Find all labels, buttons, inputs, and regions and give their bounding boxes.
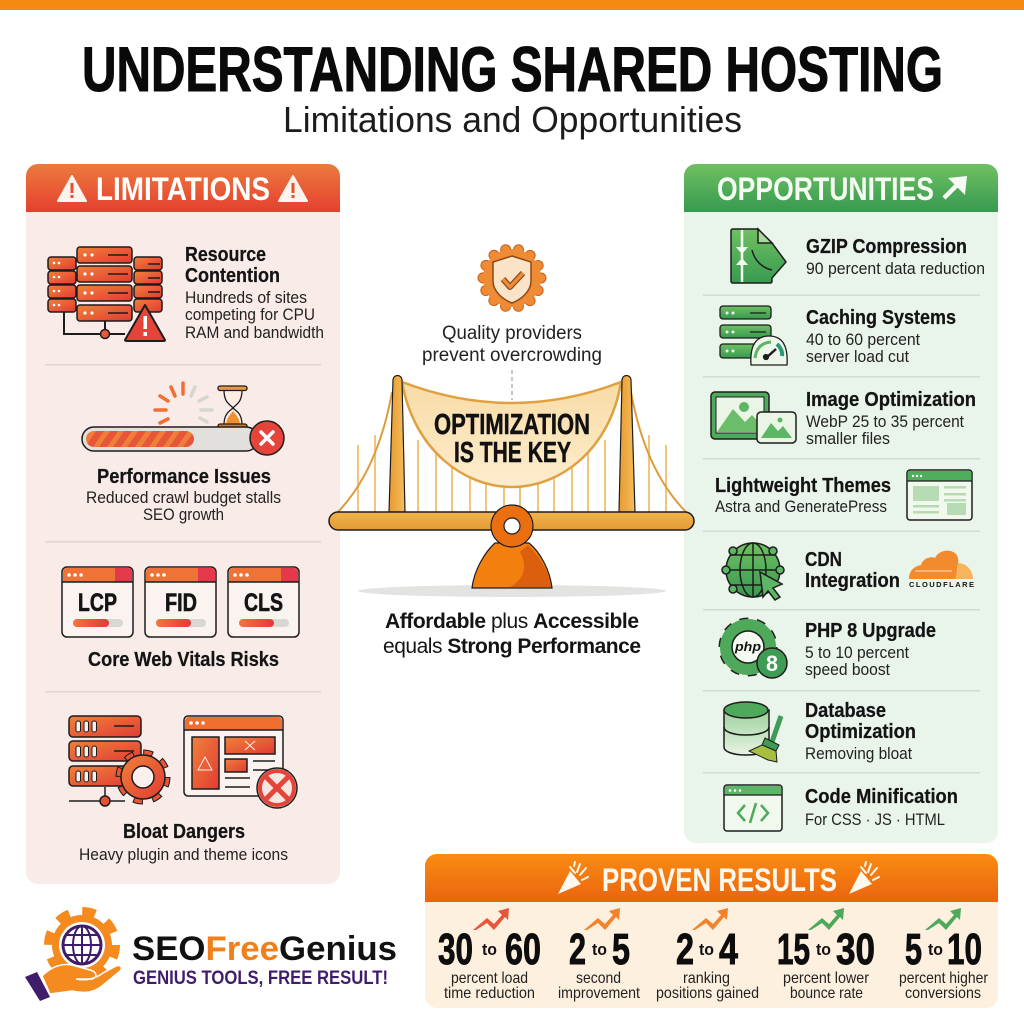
text: resource contention: competing for CPU [185, 305, 315, 324]
icon: php 8 gear: php [734, 639, 761, 654]
icon: party popper right [849, 862, 879, 894]
result: load time: percent load [451, 970, 528, 987]
opportunities header: OPPORTUNITIES [717, 171, 934, 207]
icon: gzip file [731, 229, 786, 283]
result: rankings [656, 908, 759, 1002]
text: resource contention: RAM and bandwidth [185, 323, 324, 342]
result: seconds: second [576, 970, 621, 987]
result: bounce rate: percent lower [783, 970, 870, 987]
results header: PROVEN RESULTS [602, 862, 837, 898]
logo: cloudflare [909, 551, 974, 589]
ground shadow [358, 585, 666, 597]
icon: server stack with warning [48, 247, 165, 341]
top accent bar [0, 0, 1024, 10]
text: bloat dangers: Bloat Dangers [123, 821, 245, 843]
bridge [329, 376, 694, 530]
result: seconds: 2 [569, 925, 586, 974]
text: database optimization: Removing bloat [805, 744, 912, 763]
result: rankings: 2 [676, 925, 694, 974]
text: resource contention: Resource [185, 244, 266, 266]
opportunities header [684, 164, 998, 212]
banner [402, 382, 621, 487]
text: performance issues: Reduced crawl budget stalls [86, 488, 281, 507]
text: caching systems: 40 to 60 percent [806, 330, 920, 349]
card: FID [145, 567, 216, 637]
text: quality providers [422, 323, 602, 366]
text: gzip compression: 90 percent data reduction [806, 259, 985, 278]
text: database optimization [805, 700, 916, 763]
logo: SEOFreeGenius [25, 912, 397, 1001]
result: load time [438, 908, 541, 1002]
result: conversions: 5 [905, 925, 922, 974]
result: conversions: percent higher [899, 970, 989, 987]
result: rankings: 4 [719, 925, 738, 974]
text: core web vitals risks: Core Web Vitals Risks [88, 649, 279, 671]
logo tagline: GENIUS TOOLS, FREE RESULT! [133, 968, 388, 989]
card: FID: FID [165, 589, 197, 617]
text: database optimization: Optimization [805, 721, 916, 743]
logo gear and globe [49, 912, 115, 978]
logo: cloudflare: CLOUDFLARE [909, 580, 974, 589]
text: quality providers: prevent overcrowding [422, 345, 602, 366]
card: CLS [228, 567, 299, 637]
icon: lightweight theme window [907, 470, 972, 520]
result: rankings: positions gained [656, 985, 759, 1002]
text: equation [383, 610, 641, 658]
text: performance issues [86, 466, 281, 524]
icon: party popper left [558, 862, 588, 894]
result: bounce rate: 15 [777, 925, 810, 974]
result: bounce rate: bounce rate [790, 985, 863, 1002]
text: image optimization: Image Optimization [806, 389, 976, 411]
result: rankings: to [699, 940, 714, 959]
text: image optimization [806, 389, 976, 448]
result: seconds: to [592, 940, 607, 959]
card: CLS: CLS [244, 589, 283, 617]
text: performance issues: Performance Issues [97, 466, 271, 488]
icon: database with broom [724, 702, 781, 762]
result: bounce rate: to [816, 940, 831, 959]
text: image optimization: smaller files [806, 429, 890, 448]
panel: opportunities [684, 164, 998, 843]
text: image optimization: WebP 25 to 35 percent [806, 412, 964, 431]
central bridge balance [329, 249, 694, 658]
text: database optimization: Database [805, 700, 886, 722]
result: conversions: conversions [905, 985, 981, 1002]
text: php 8 upgrade [805, 620, 936, 679]
logo hand [25, 965, 121, 1001]
text: caching systems: Caching Systems [806, 307, 956, 329]
text: cdn integration: Integration [805, 570, 900, 592]
result: seconds: improvement [558, 985, 640, 1002]
subtitle: Limitations and Opportunities [283, 99, 742, 140]
text: equation: equals Strong Performance [383, 635, 641, 658]
text: lightweight themes [715, 475, 891, 516]
text: bloat dangers [79, 821, 288, 864]
result: conversions: 10 [947, 925, 982, 974]
icon: cdn globe [722, 543, 784, 600]
icon: server with gear [69, 716, 167, 806]
text: gzip compression [806, 236, 985, 278]
text: resource contention [185, 244, 324, 342]
text: performance issues: SEO growth [143, 505, 224, 524]
text: resource contention: Hundreds of sites [185, 288, 307, 307]
text: php 8 upgrade: PHP 8 Upgrade [805, 620, 936, 642]
text: lightweight themes: Astra and GeneratePress [715, 497, 887, 516]
result: conversions [899, 908, 989, 1002]
result: bounce rate [777, 908, 875, 1002]
text: quality providers: Quality providers [442, 323, 582, 344]
result: load time: time reduction [444, 985, 535, 1002]
text: gzip compression: GZIP Compression [806, 236, 967, 258]
result: seconds: 5 [612, 925, 630, 974]
fulcrum [472, 505, 552, 588]
text: resource contention: Contention [185, 265, 280, 287]
banner: IS THE KEY [454, 437, 571, 469]
results header [425, 854, 998, 902]
result: load time: to [482, 940, 497, 959]
text: code minification [805, 786, 958, 829]
text: cdn integration: CDN [805, 549, 842, 571]
result: seconds [558, 908, 640, 1002]
card: LCP: LCP [78, 589, 117, 617]
icon: code window [724, 785, 782, 831]
result: load time: 60 [505, 925, 541, 974]
text: php 8 upgrade: speed boost [805, 660, 890, 679]
banner: OPTIMIZATION [434, 409, 590, 441]
text: bloat dangers: Heavy plugin and theme icons [79, 845, 288, 864]
icon: bloated browser window [184, 716, 297, 808]
text: code minification: Code Minification [805, 786, 958, 808]
text: php 8 upgrade: 5 to 10 percent [805, 643, 909, 662]
icon: caching server gauge [720, 306, 787, 365]
icon: quality shield badge [483, 249, 541, 307]
icon: php 8 gear [723, 622, 787, 678]
towers [389, 376, 635, 512]
result: load time: 30 [438, 925, 473, 974]
limitations header: LIMITATIONS [96, 171, 270, 207]
logo wordmark: SEOFreeGenius [132, 930, 397, 968]
result: conversions: to [928, 940, 943, 959]
panel: limitations [26, 164, 340, 884]
text: code minification: For CSS · JS · HTML [805, 810, 945, 829]
text: caching systems: server load cut [806, 347, 909, 366]
text: cdn integration [805, 549, 900, 592]
core web vitals cards [62, 567, 299, 637]
result: rankings: ranking [683, 970, 730, 987]
icon: image optimization [711, 392, 796, 443]
icon: stalled progress bar with hourglass [82, 383, 284, 455]
limitations header [26, 164, 340, 212]
result: bounce rate: 30 [836, 925, 875, 974]
card: LCP [62, 567, 133, 637]
text: equation: Affordable plus Accessible [385, 610, 639, 633]
text: lightweight themes: Lightweight Themes [715, 475, 891, 497]
icon: php 8 gear: 8 [766, 651, 778, 676]
panel: proven results [425, 854, 998, 1008]
text: caching systems [806, 307, 956, 366]
